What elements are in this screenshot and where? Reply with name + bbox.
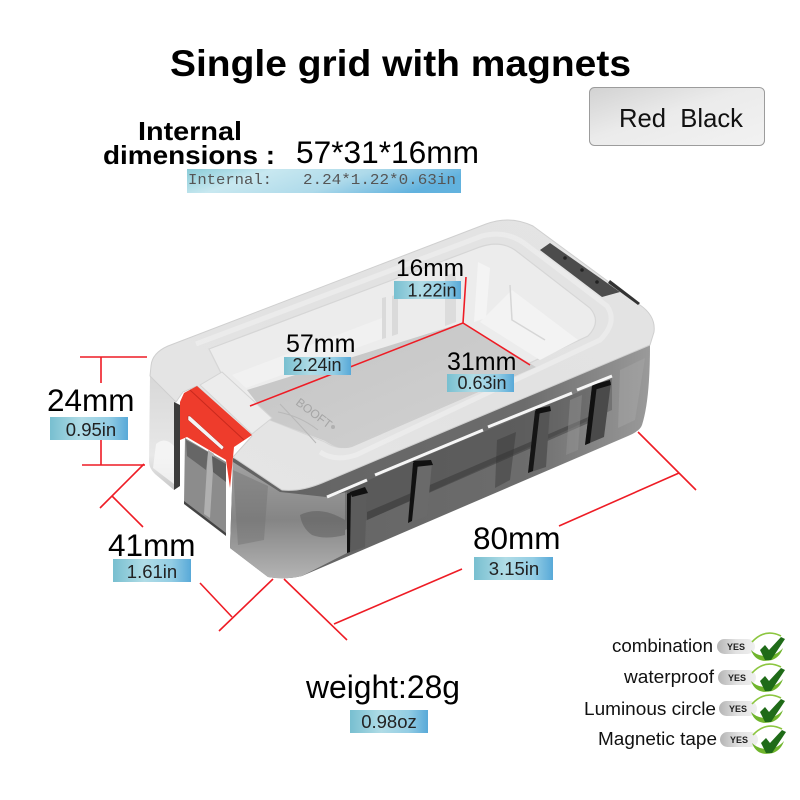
label: 31mm: 31mm [447,348,516,376]
left clear wall [149,376,176,490]
feature: magnetic tape: YES [730,735,748,746]
body inner bands [345,358,645,530]
feature: magnetic tape: Magnetic tape [598,728,717,749]
brand mark: BOOFT [293,395,335,432]
dark latch [540,243,640,305]
feature: luminous circle: Luminous circle [584,698,716,719]
dimension line: 80mm length [284,432,696,640]
red latch [180,386,252,488]
translucent front corner [230,462,347,578]
box dark lower body [230,345,650,578]
feature: combination [612,633,785,661]
inner box floor [247,323,536,448]
feature: combination: YES [727,642,745,653]
label: 24mm: 0.95in [66,419,116,440]
internal dimensions block: Internal [138,116,242,146]
label: 31mm: 0.63in [457,373,507,393]
label: 41mm: 41mm [108,527,196,563]
label: weight: weight:28g [305,669,460,705]
white lid edge strips [327,376,612,497]
label: 80mm: 3.15in [489,558,539,579]
brand mark [278,395,335,443]
label: weight: 0.98oz [361,711,417,732]
internal dimensions block: Internal: [188,172,272,189]
feature: luminous circle [584,695,785,723]
internal dimensions block: 57*31*16mm [296,134,479,170]
label: 57mm: 57mm [286,330,355,358]
colour option button [590,88,764,146]
feature: waterproof: waterproof [623,666,715,687]
side black clips [347,380,611,553]
feature: combination: combination [612,635,713,656]
feature: waterproof [623,664,785,692]
front tab [184,438,226,536]
transparent hinge strip [200,372,272,434]
feature: luminous circle: YES [729,704,747,715]
label: 16mm [394,255,464,300]
label: 57mm: 2.24in [292,355,342,375]
label: 24mm: 24mm [47,382,135,418]
lid [150,220,654,490]
internal dimensions block [103,116,479,193]
label: 80mm [473,520,561,580]
label: weight [305,669,460,733]
internal dimension lines [250,277,530,406]
dimension line: 24mm height [80,357,147,465]
colour option button: Red Black [619,103,744,133]
lid rim highlight [196,234,611,458]
title: Single grid with magnets [170,43,631,84]
feature: waterproof: YES [728,673,746,684]
product photo: transparent box [149,220,654,578]
lid window [209,244,596,448]
label: 24mm [47,382,135,440]
internal dimensions block: dimensions : [103,140,275,170]
label: 16mm: 16mm [396,255,464,282]
label: 80mm: 80mm [473,520,561,556]
dimension line: 41mm width [100,464,273,631]
internal dimensions block: 2.24*1.22*0.63in [303,172,456,189]
label: 57mm [284,330,355,375]
inner wall panes [232,262,578,388]
feature list [584,633,786,754]
feature: magnetic tape [598,726,786,754]
label: 41mm [108,527,196,582]
label: 16mm: 1.22in [407,280,457,300]
label: 31mm [447,348,516,393]
label: 41mm: 1.61in [127,561,177,582]
